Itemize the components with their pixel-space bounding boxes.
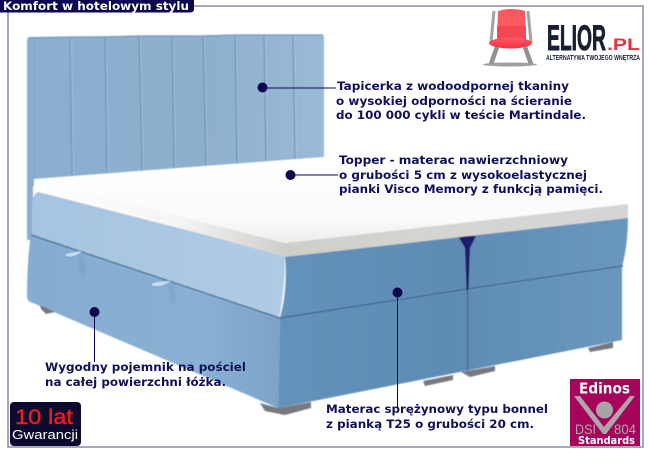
badge: Edinos standards: Edinos [579, 380, 630, 398]
callout: storage [45, 307, 246, 389]
topper [34, 157, 628, 257]
mattress upper front face [280, 216, 628, 318]
mattress upper left face [32, 192, 285, 318]
badge: Edinos standards: DSI [575, 422, 596, 437]
badge: Edinos standards: Standards [578, 434, 635, 447]
callout: mattress: Materac sprężynowy typu bonnel [326, 402, 548, 416]
callout: topper: Topper - materac nawierzchniowy [339, 153, 569, 167]
badge: 10 lat gwarancji: Gwarancji [12, 428, 78, 442]
callout: topper [286, 153, 603, 196]
badge: Edinos standards: 804 [614, 422, 636, 437]
callout: mattress [326, 288, 548, 431]
callout: mattress: z pianką T25 o grubości 20 cm. [326, 417, 534, 431]
callout: upholstery: Tapicerka z wodoodpornej tkaniny [337, 79, 570, 93]
callout: upholstery: o wysokiej odporności na ścieranie [336, 94, 572, 108]
handles [65, 251, 174, 303]
callout: storage: Wygodny pojemnik na pościel [45, 360, 246, 374]
logo: Elior [483, 9, 640, 66]
seams [31, 235, 623, 318]
callout: topper: o grubości 5 cm z wysokoelastycznej [339, 168, 587, 182]
logo: Elior: .PL [607, 35, 640, 54]
badge: 10 lat gwarancji: 10 lat [15, 406, 73, 429]
callout: upholstery [258, 79, 586, 122]
callout: storage: na całej powierzchni łóżka. [45, 375, 226, 389]
box lower front face [278, 267, 622, 408]
bed illustration [27, 34, 628, 415]
box lower left face [27, 235, 280, 408]
callout: upholstery: do 100 000 cykli w teście Martindale. [336, 108, 586, 122]
callout: topper: pianki Visco Memory z funkcją pamięci. [339, 182, 603, 196]
badge: 10 lat gwarancji [10, 402, 81, 446]
feet [40, 305, 613, 415]
headboard [27, 34, 324, 240]
badge: Edinos standards [570, 379, 640, 447]
icon: chair [483, 9, 537, 66]
